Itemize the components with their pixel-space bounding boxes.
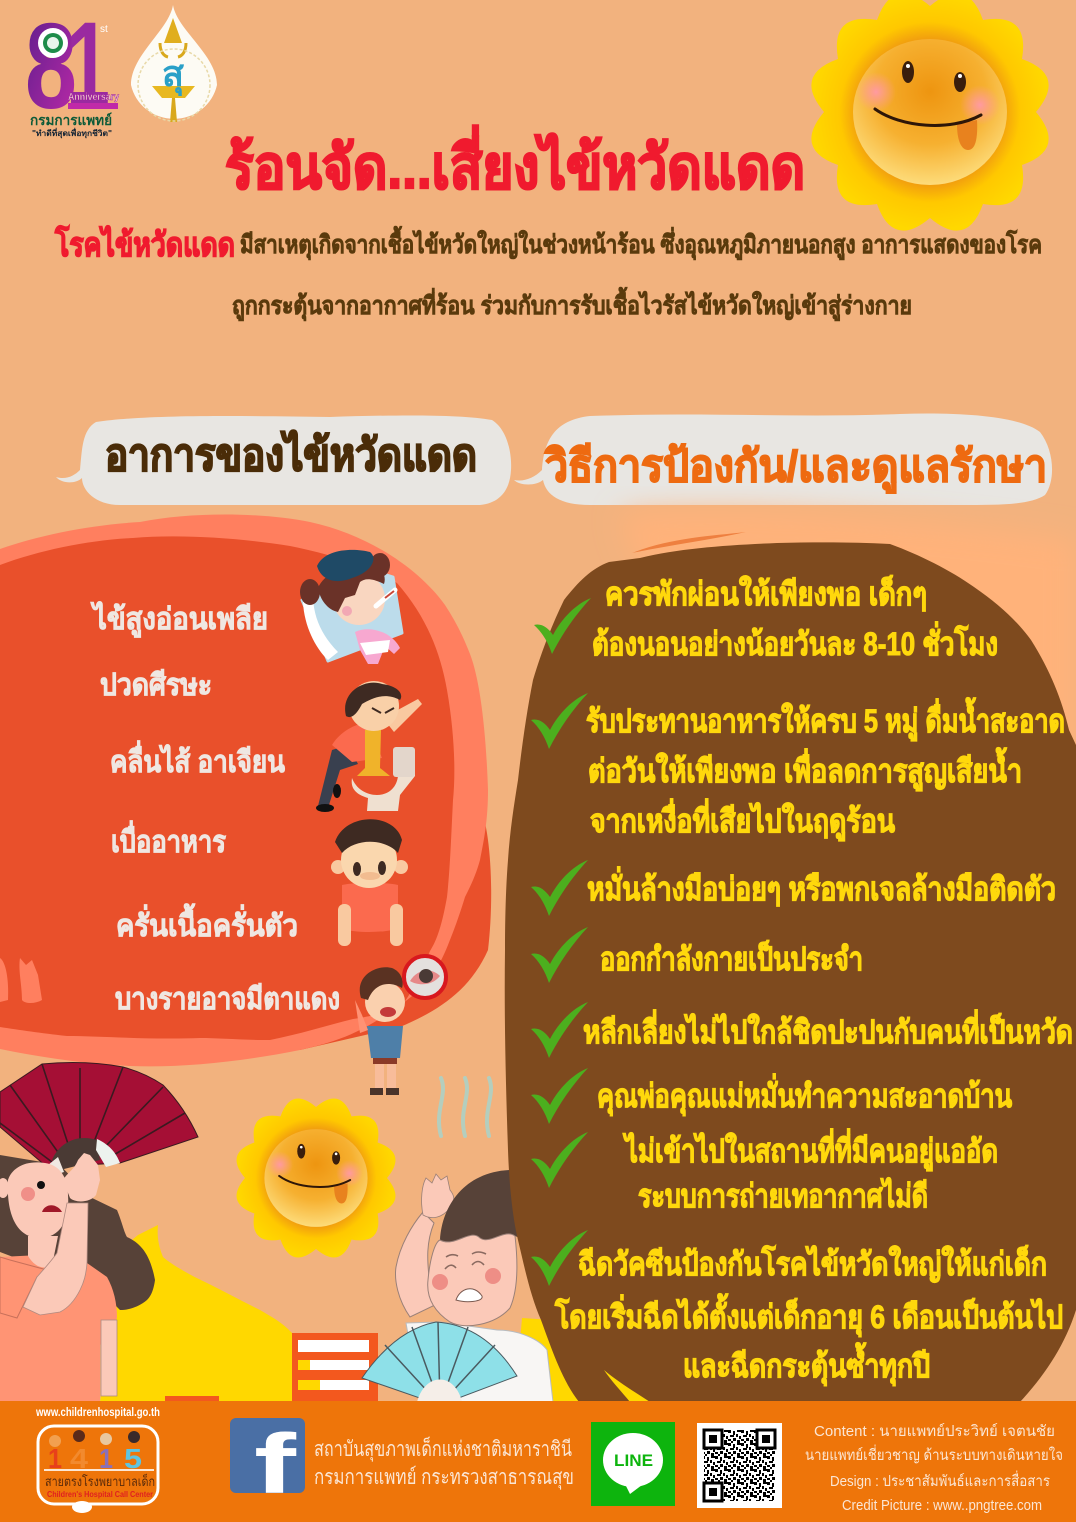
fan <box>0 1063 198 1175</box>
credits: Content : นายแพทย์ประวิทย์ เจตนชัย <box>814 1423 1055 1440</box>
speech bubble heading: prevention and care <box>514 414 1052 505</box>
icon: crying boy with red eye callout <box>355 956 446 1095</box>
symptom list: เบื่ออาหาร <box>111 820 226 859</box>
advice 1 <box>592 574 998 662</box>
inner red area <box>0 536 454 1040</box>
logo: 81st anniversary Department of Medical Services: st <box>100 24 108 35</box>
icon: LINE: LINE <box>614 1451 653 1470</box>
advice 4: ออกกำลังกายเป็นประจำ <box>600 939 863 977</box>
credits: Design : ประชาสัมพันธ์และการสื่อสาร <box>830 1470 1050 1490</box>
logo: 81st anniversary Department of Medical Services: "ทำดีที่สุดเพื่อทุกชีวิต" <box>32 127 112 139</box>
intro paragraph: ถูกกระตุ้นจากอากาศที่ร้อน ร่วมกับการรับเชื้อไวรัสไข้หวัดใหญ่เข้าสู่ร่างกาย <box>232 286 912 322</box>
blue fan <box>362 1322 517 1405</box>
institute name: กรมการแพทย์ กระทรวงสาธารณสุข <box>314 1465 574 1490</box>
institute name <box>314 1435 574 1490</box>
hotline 1415 logo: 1 <box>99 1443 113 1474</box>
intro paragraph <box>54 225 1042 322</box>
hand prints <box>0 958 42 1003</box>
footer <box>0 1401 1076 1522</box>
icon: LINE <box>591 1422 675 1506</box>
speech bubble heading: symptoms: อาการของไข้หวัดแดด <box>105 429 477 480</box>
logo: 81st anniversary Department of Medical Services: กรมการแพทย์ <box>30 112 112 128</box>
credits: Credit Picture : www..pngtree.com <box>842 1497 1042 1514</box>
illustration: man with blue fan <box>362 1170 553 1405</box>
small sun <box>237 1099 395 1257</box>
credits <box>805 1423 1063 1514</box>
hotline 1415 logo: สายตรงโรงพยาบาลเด็ก <box>45 1472 155 1489</box>
logo: 81st anniversary Department of Medical Services <box>25 0 119 139</box>
hotline 1415 logo: 5 <box>124 1443 142 1474</box>
sleeve <box>0 1257 47 1318</box>
brush streak <box>632 532 746 553</box>
symptom list <box>90 601 340 1016</box>
advice 7 <box>623 1128 998 1214</box>
advice 8: และฉีดกระตุ้นซ้ำทุกปี <box>683 1342 930 1387</box>
symptom list: ไข้สูงอ่อนเพลีย <box>90 601 268 638</box>
logo: 81st anniversary Department of Medical Services: Anniversary <box>68 92 119 103</box>
arm <box>396 1212 435 1317</box>
building <box>165 1333 378 1402</box>
title: ร้อนจัด...เสี่ยงไข้หวัดแดด <box>225 125 805 201</box>
shirt <box>0 1255 117 1402</box>
neck <box>28 1236 58 1268</box>
advice 2: จากเหงื่อที่เสียไปในฤดูร้อน <box>590 798 895 842</box>
speech bubble heading: prevention and care: วิธีการป้องกัน/และดูแลรักษา <box>544 442 1047 493</box>
hotline 1415 logo <box>38 1426 158 1513</box>
speech bubble heading: symptoms <box>56 415 511 505</box>
advice 2 <box>586 697 1065 842</box>
symptom list: ปวดศีรษะ <box>100 669 212 702</box>
advice 1: ควรพักผ่อนให้เพียงพอ เด็กๆ <box>605 574 927 612</box>
website: www.childrenhospital.go.th <box>35 1407 160 1419</box>
logo: royal water drop emblem <box>131 5 217 122</box>
institute name: สถาบันสุขภาพเด็กแห่งชาติมหาราชินี <box>314 1435 572 1462</box>
check marks <box>531 598 591 1286</box>
face <box>8 1162 68 1238</box>
icon: tired boy <box>331 819 408 946</box>
outer dark red corner <box>260 800 491 1050</box>
eye callout <box>404 956 446 998</box>
advice 8 <box>554 1244 1063 1387</box>
symptom list: คลื่นไส้ อาเจียน <box>110 740 285 779</box>
logo: 81st anniversary Department of Medical Services: 8 <box>25 0 77 134</box>
yellow crescent <box>604 1370 650 1402</box>
intro paragraph: โรคไข้หวัดแดด <box>54 225 235 263</box>
yellow behind man <box>515 1318 582 1402</box>
hotline 1415 logo: 4 <box>70 1443 88 1474</box>
hotline 1415 logo: 1 <box>48 1443 62 1474</box>
symptom list: บางรายอาจมีตาแดง <box>115 983 340 1016</box>
head <box>428 1234 517 1326</box>
salmon band <box>0 514 488 1066</box>
logo: royal water drop emblem: สุ <box>162 53 184 97</box>
arm and hand <box>23 1203 88 1315</box>
QR code <box>697 1423 782 1508</box>
hair <box>440 1170 525 1242</box>
big smiling sun <box>811 0 1049 231</box>
hotline 1415 logo: Children's Hospital Call Center <box>47 1490 153 1499</box>
panel: symptoms <box>0 514 491 1066</box>
icon: feverish girl on pillow <box>300 550 402 664</box>
lighter peach backing behind advice panel <box>620 511 1076 760</box>
icon: facebook <box>230 1417 305 1511</box>
symptom list: ครั่นเนื้อครั่นตัว <box>116 903 298 943</box>
panel: prevention advice <box>505 532 1076 1402</box>
hair <box>0 1155 155 1310</box>
icon: boy vomiting into toilet <box>316 681 422 812</box>
icon: facebook: f <box>254 1417 298 1511</box>
hand <box>422 1174 454 1218</box>
decorative yellow hill <box>100 1225 292 1402</box>
shirt <box>406 1322 553 1402</box>
logo: 81st anniversary Department of Medical Services: 1 <box>66 0 110 130</box>
heat waves <box>439 1078 491 1136</box>
advice 7: ระบบการถ่ายเทอากาศไม่ดี <box>638 1177 928 1214</box>
illustration: woman with red fan <box>0 1063 198 1402</box>
